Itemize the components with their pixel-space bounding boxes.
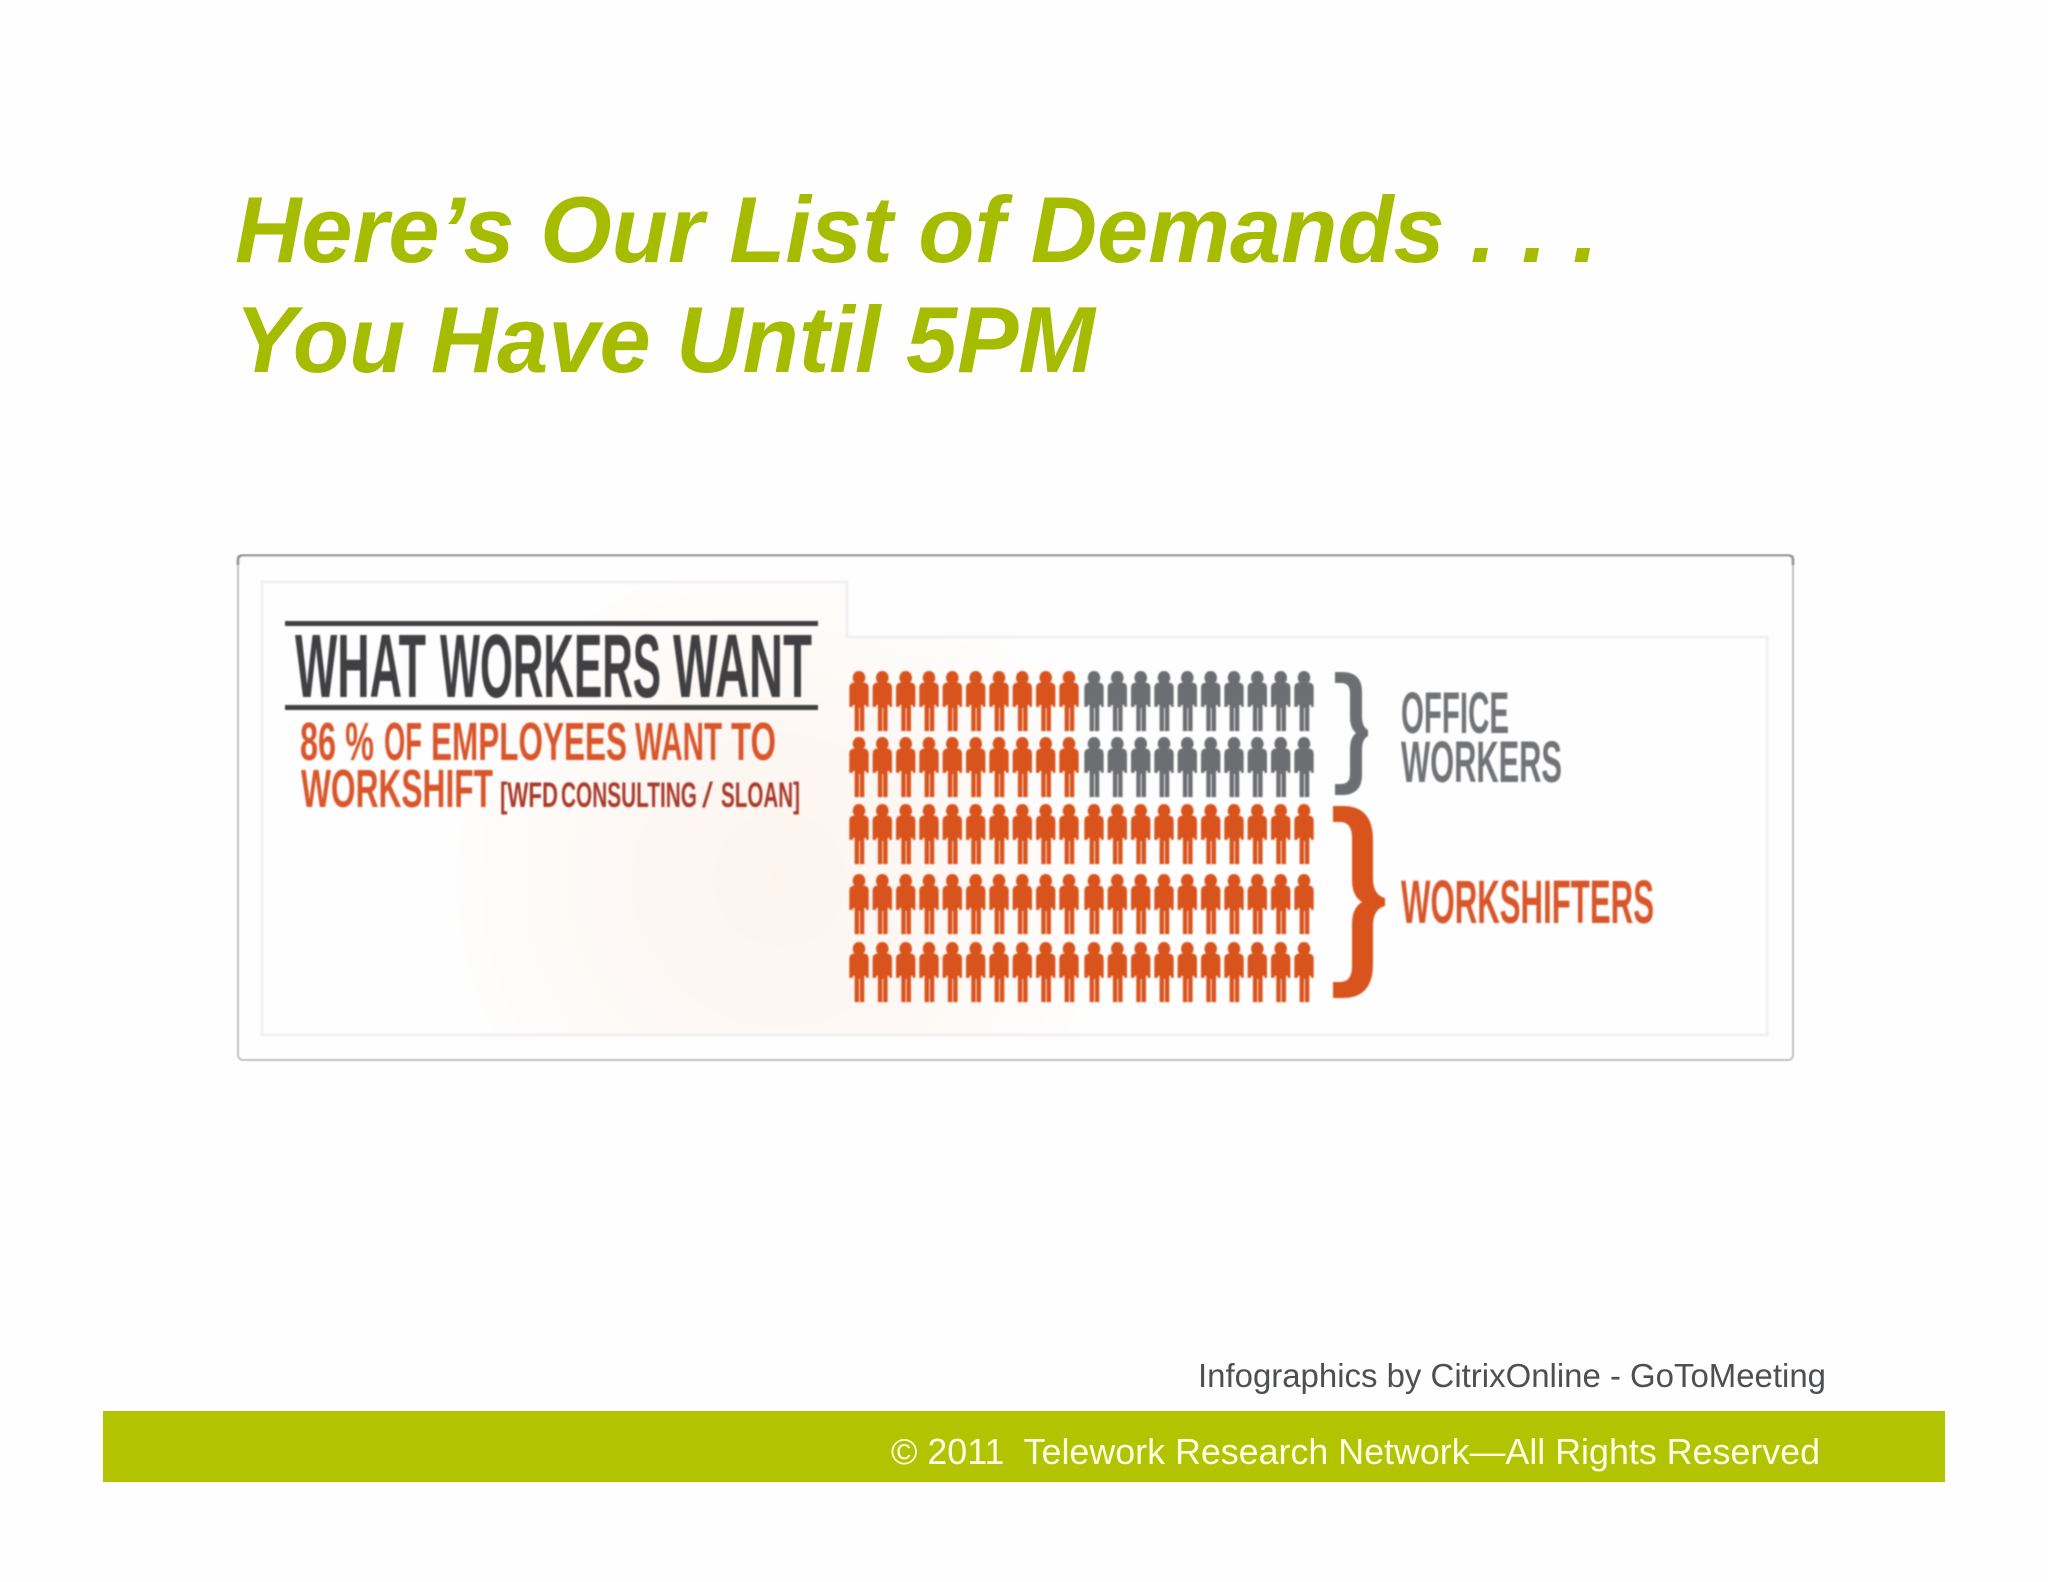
heading: what workers want: WHAT (295, 617, 426, 717)
title (235, 177, 1598, 392)
subheading: 86 percent statement: OF (384, 712, 422, 772)
credit line: Infographics by CitrixOnline - GoToMeeting (1198, 1357, 1826, 1394)
source citation: CONSULTING (561, 776, 697, 815)
source citation: SLOAN] (721, 776, 800, 815)
subheading: 86 percent statement: WANT (635, 712, 722, 772)
pictogram: 100 people (849, 671, 1314, 1002)
title: You Have Until 5PM (235, 287, 1097, 392)
brace: workshifters (1333, 806, 1385, 998)
orange people rows 3-5 (849, 804, 1314, 1002)
label: workshifters: WORKSHIFTERS (1401, 868, 1654, 936)
label: office workers: WORKERS (1401, 730, 1562, 795)
subheading: 86 percent statement: EMPLOYEES (431, 712, 627, 772)
label: office workers: OFFICE (1401, 681, 1509, 746)
subheading: 86 percent statement: TO (731, 712, 776, 772)
heading: what workers want: WORKERS (440, 617, 661, 717)
title: Here’s Our List of Demands . . . (235, 177, 1598, 282)
panel frame (238, 555, 1793, 1060)
orange people rows 1-2, left half (849, 671, 1079, 797)
gray people rows 1-2, right half (1084, 671, 1314, 797)
footer bar (103, 1411, 1945, 1482)
subheading: 86 percent statement: 86 % (300, 712, 374, 772)
brace: office workers (1335, 672, 1368, 795)
subheading: 86 percent statement (300, 712, 800, 819)
heading: what workers want: WANT (673, 617, 812, 717)
subheading: 86 percent statement: WORKSHIFT (301, 759, 493, 819)
source citation: / (702, 776, 713, 815)
heading: what workers want (285, 617, 818, 717)
inner panel with tab (262, 582, 1767, 1035)
copyright text: © 2011 Telework Research Network—All Rights Reserved (891, 1431, 1820, 1472)
source citation: [WFD (500, 776, 558, 815)
panel: what workers want infographic (238, 555, 1793, 1060)
label: office workers (1401, 681, 1562, 795)
